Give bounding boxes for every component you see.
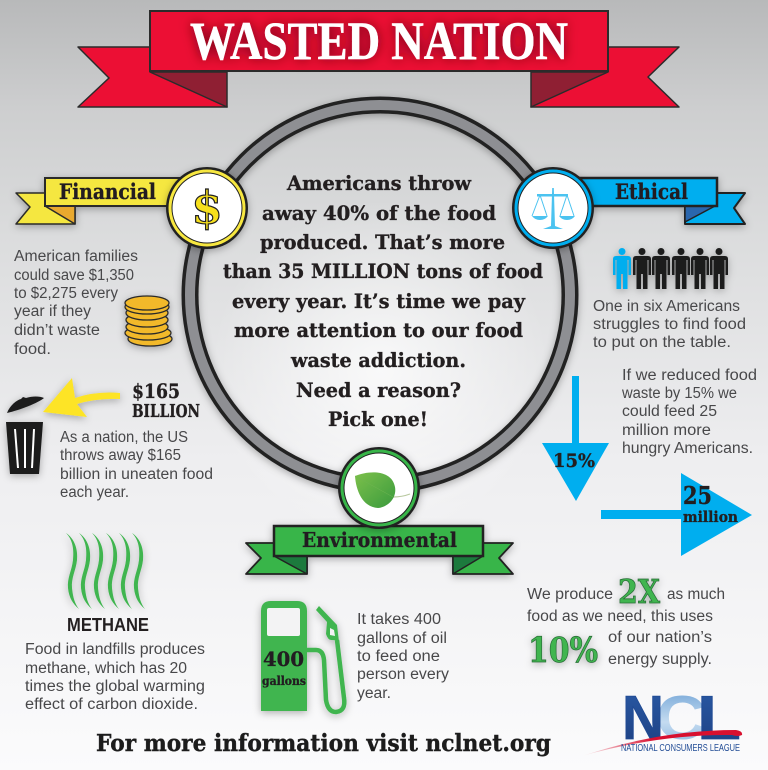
central message: Need a reason?	[296, 378, 461, 402]
text: one in six	[593, 298, 746, 351]
text: reduce waste: could feed 25	[622, 403, 717, 420]
text: family savings: didn’t waste	[14, 322, 100, 339]
icon: trash can and lid	[6, 396, 44, 474]
central message: waste addiction.	[290, 348, 466, 372]
text: one in six: One in six Americans	[593, 298, 740, 315]
central message: Americans throw	[286, 171, 472, 195]
central message: every year. It’s time we pay	[232, 289, 526, 313]
text: methane	[25, 641, 205, 713]
icon: methane waves	[66, 533, 145, 609]
icon: dollar medallion	[166, 167, 248, 249]
text: national waste: each year.	[60, 484, 129, 501]
arrow: yellow to trash	[43, 378, 120, 417]
stat: 2X and 10% energy	[527, 572, 725, 671]
central message: Pick one!	[328, 407, 428, 431]
arrow: down 15%	[542, 376, 609, 501]
heading: financial: Financial	[59, 179, 156, 204]
text: family savings: year if they	[14, 303, 91, 320]
stat: $165 billion	[132, 379, 200, 422]
icon: gas pump	[261, 601, 344, 712]
stat: 2X and 10% energy: 2X	[618, 572, 660, 611]
text: reduce waste	[621, 367, 757, 457]
text: national waste: billion in uneaten food	[60, 466, 213, 483]
title: WASTED NATION	[190, 11, 568, 71]
logo: NCL: N	[622, 684, 664, 753]
central ring	[190, 105, 570, 485]
text: national waste: throws away $165	[60, 447, 181, 464]
label: 400 gallons: 400	[263, 648, 304, 671]
central message: more attention to our food	[234, 318, 523, 342]
arrow: right 25 million	[601, 473, 752, 556]
label: 400 gallons: gallons	[262, 674, 306, 688]
text: reduce waste: If we reduced food	[622, 367, 757, 384]
text: family savings: to $2,275 every	[14, 285, 118, 302]
text: family savings	[14, 248, 138, 358]
panel: environmental ribbon	[246, 526, 513, 574]
icon: dollar medallion: $	[191, 181, 223, 234]
central message	[223, 171, 543, 431]
heading: environmental: Environmental	[302, 528, 457, 552]
icon: coin stack	[125, 296, 172, 346]
text: methane: effect of carbon dioxide.	[25, 696, 198, 713]
heading: methane: METHANE	[67, 615, 149, 635]
text: gallons of oil: person every	[357, 666, 449, 683]
central message: than 35 MILLION tons of food	[223, 259, 543, 283]
text: family savings: could save $1,350	[14, 267, 134, 284]
text: gallons of oil	[357, 611, 449, 702]
stat: $165 billion: $165	[132, 379, 180, 403]
central message: produced. That’s more	[260, 230, 505, 254]
heading: ethical: Ethical	[615, 179, 688, 204]
text: national waste: As a nation, the US	[60, 429, 188, 446]
panel: ethical ribbon	[580, 178, 745, 224]
label: 400 gallons	[262, 648, 306, 688]
logo: NCL: L	[697, 684, 741, 753]
arrow: right 25 million: million	[683, 508, 738, 526]
text: reduce waste: waste by 15% we	[621, 385, 737, 402]
icon: six people	[613, 248, 728, 289]
footer: For more information visit nclnet.org	[96, 730, 551, 757]
central message: away 40% of the food	[262, 201, 496, 225]
text: one in six: to put on the table.	[593, 334, 731, 351]
arrow: right 25 million: 25	[683, 481, 712, 510]
text: one in six: struggles to find food	[593, 316, 746, 333]
panel: financial ribbon	[16, 178, 180, 224]
text: national waste	[60, 429, 213, 501]
text: reduce waste: hungry Americans.	[622, 440, 753, 457]
stat: 2X and 10% energy: 10%	[528, 630, 598, 671]
stat: 2X and 10% energy: energy supply.	[608, 651, 712, 668]
icon: leaf medallion	[338, 447, 420, 529]
stat: 2X and 10% energy: as much	[667, 586, 725, 603]
title banner	[78, 11, 679, 107]
logo: NCL: C	[656, 684, 706, 753]
arrow: down 15%: 15%	[553, 450, 595, 472]
text: methane: methane, which has 20	[25, 660, 187, 677]
text: gallons of oil: year.	[357, 685, 391, 702]
logo: NCL	[582, 684, 742, 756]
stat: 2X and 10% energy: food as we need, this uses	[527, 608, 713, 625]
stat: 2X and 10% energy: of our nation’s	[608, 629, 712, 646]
stat: 2X and 10% energy: We produce	[527, 586, 613, 603]
text: family savings: food.	[14, 341, 51, 358]
text: methane: times the global warming	[25, 678, 205, 695]
text: family savings: American families	[14, 248, 138, 265]
text: gallons of oil: It takes 400	[357, 611, 441, 628]
text: gallons of oil: to feed one	[357, 648, 440, 665]
text: gallons of oil: gallons of oil	[357, 630, 447, 647]
stat: $165 billion: BILLION	[132, 401, 200, 422]
icon: scales medallion	[512, 167, 594, 249]
text: reduce waste: million more	[622, 422, 711, 439]
text: methane: Food in landfills produces	[25, 641, 205, 658]
